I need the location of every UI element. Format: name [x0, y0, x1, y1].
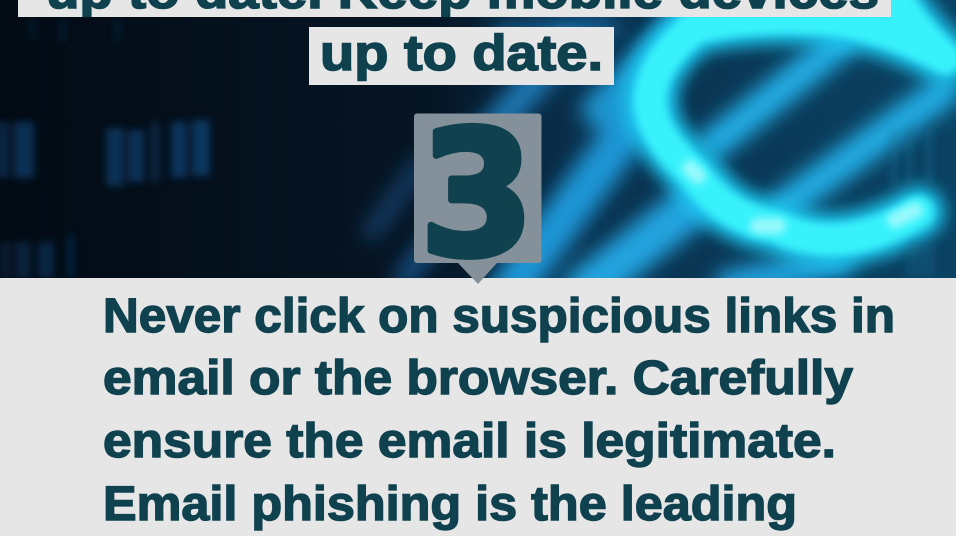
- text line 2: email or the browser. Carefully: [103, 352, 853, 405]
- number 3: 3: [420, 94, 534, 295]
- background: glowing blue technology photo: [0, 0, 956, 290]
- number marker 3: [414, 94, 542, 295]
- marker shape: [414, 114, 542, 284]
- text line 3: ensure the email is legitimate.: [103, 415, 836, 468]
- tip text block: [103, 290, 895, 531]
- previous tip text: [18, 0, 891, 85]
- vertical light streaks: [0, 18, 935, 278]
- text line: up to date.: up to date.: [320, 25, 603, 81]
- text line 1: Never click on suspicious links in: [103, 290, 895, 343]
- glowing ring: [650, 0, 945, 239]
- panel: tip text background: [0, 278, 956, 536]
- text line 4: Email phishing is the leading: [103, 478, 797, 531]
